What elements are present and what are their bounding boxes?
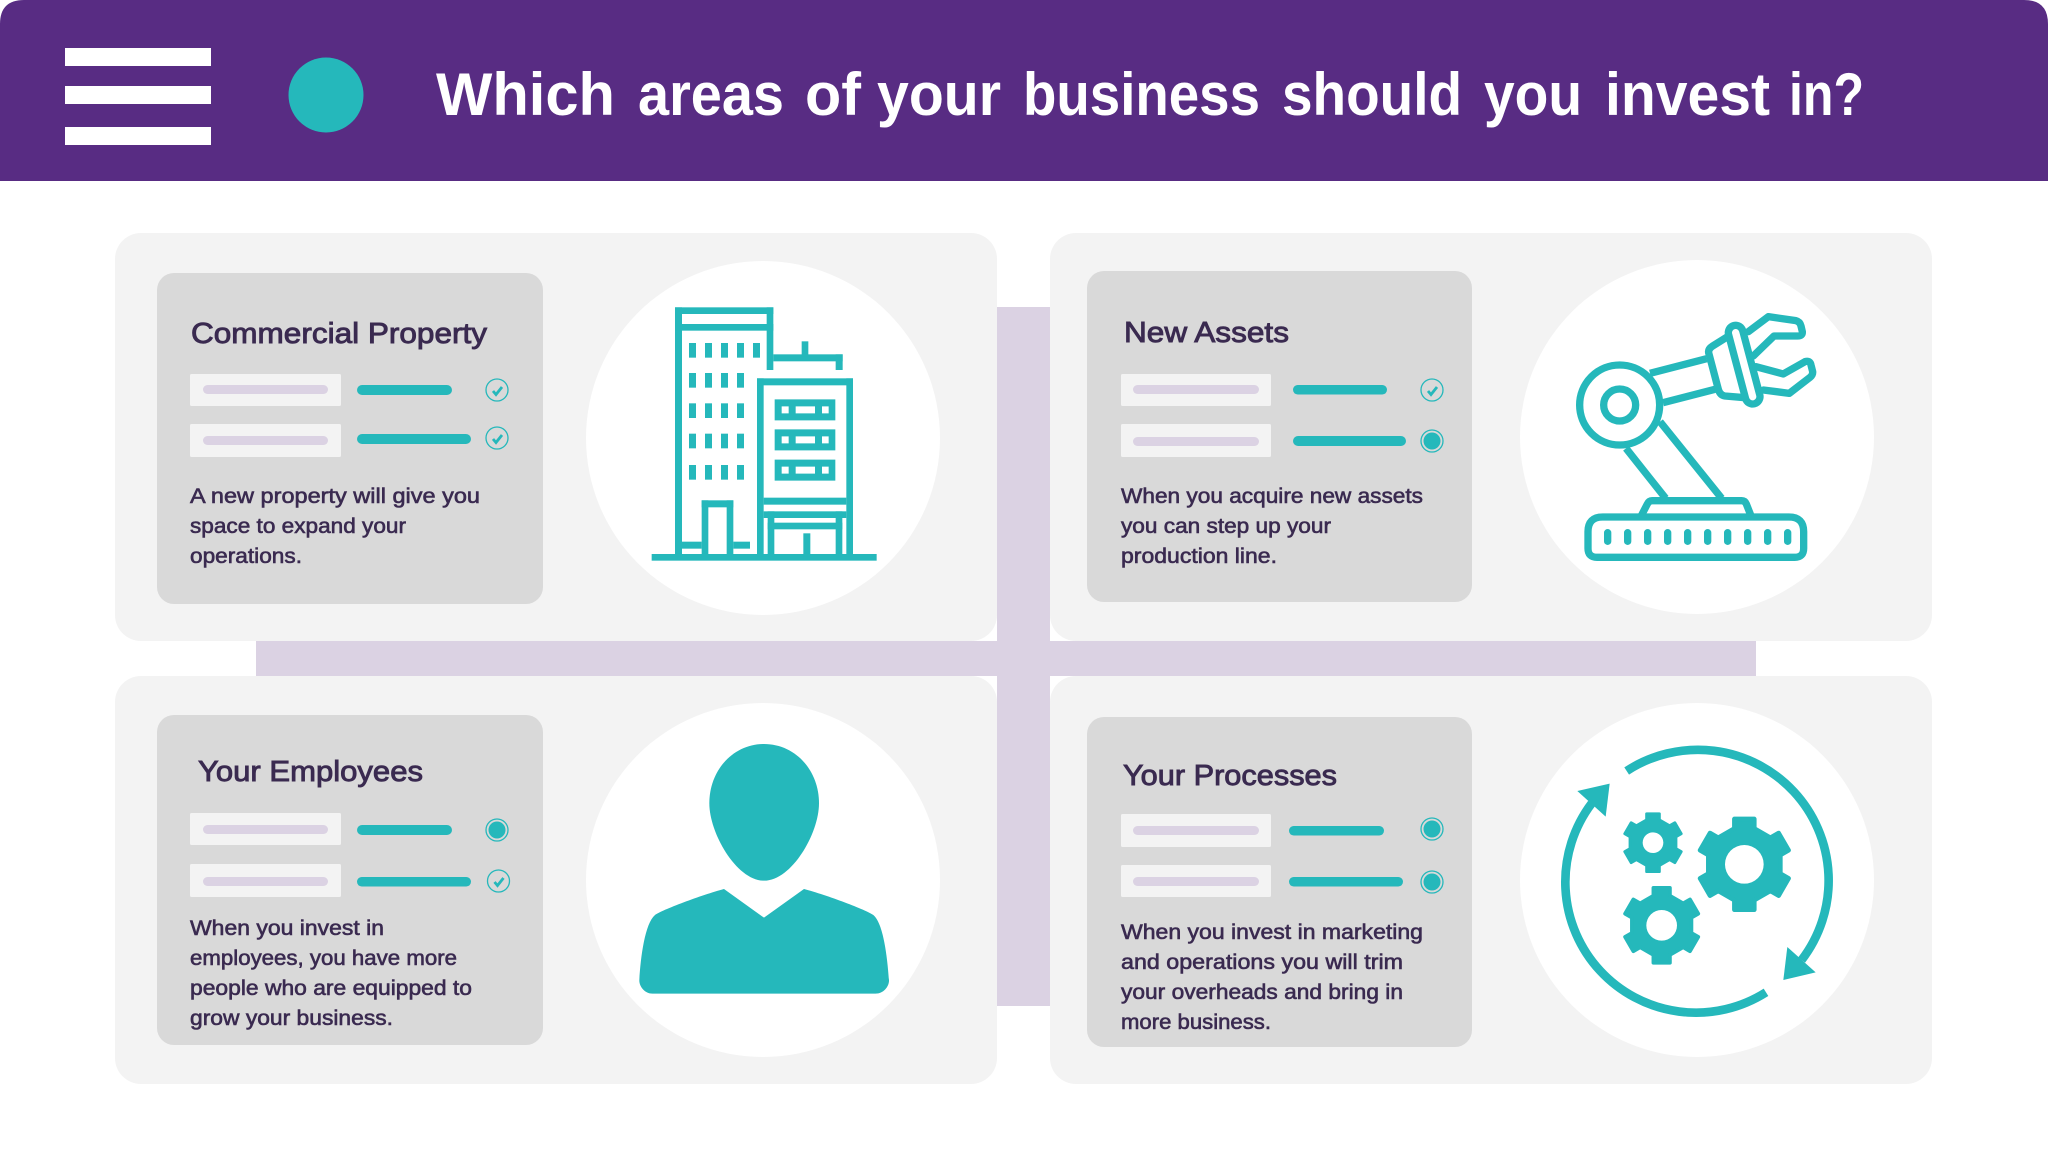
card: new assets [1087, 271, 1472, 602]
row 2 [1121, 424, 1443, 457]
icon: menu bars [65, 48, 211, 145]
icon circle: person [586, 703, 940, 1057]
body text: When you acquire new assets [1121, 485, 1423, 508]
body text: more business. [1121, 1011, 1271, 1034]
title: should [1282, 61, 1462, 128]
title [436, 61, 1864, 128]
panel: commercial property [115, 233, 997, 641]
title: your [877, 61, 1001, 128]
panel: new assets [1050, 233, 1932, 641]
heading: Commercial Property [191, 318, 488, 350]
row 1 [190, 813, 508, 845]
heading: New Assets [1124, 317, 1289, 349]
body text: operations. [190, 545, 302, 568]
panel: your processes [1050, 676, 1932, 1084]
title: areas [638, 61, 784, 128]
body text: employees, you have more [190, 947, 457, 970]
body text: space to expand your [190, 515, 406, 538]
title: you [1484, 61, 1582, 128]
body text: people who are equipped to [190, 977, 472, 1000]
card: commercial property [157, 273, 543, 604]
body text [190, 485, 480, 568]
body text: you can step up your [1121, 515, 1331, 538]
row 2 [190, 864, 510, 897]
body text: A new property will give you [190, 485, 480, 508]
body text [1121, 485, 1423, 568]
card: your employees [157, 715, 543, 1045]
heading: Your Processes [1123, 760, 1337, 792]
body text: production line. [1121, 545, 1277, 568]
row 1 [1121, 814, 1443, 847]
icon circle: gears and cycle arrows [1520, 703, 1874, 1057]
title: invest [1605, 61, 1770, 128]
icon circle: robot arm [1520, 260, 1874, 614]
body text: When you invest in [190, 917, 384, 940]
body text: When you invest in marketing [1121, 921, 1423, 944]
row 2 [190, 424, 508, 457]
panel: your employees [115, 676, 997, 1084]
title: in? [1789, 61, 1864, 128]
body text: your overheads and bring in [1121, 981, 1403, 1004]
row 2 [1121, 865, 1443, 897]
title: business [1023, 61, 1260, 128]
header band [0, 0, 2048, 181]
body text: grow your business. [190, 1007, 393, 1030]
title: Which [436, 61, 615, 128]
row 1 [1121, 374, 1443, 406]
heading: Your Employees [198, 756, 423, 788]
body text [1121, 921, 1423, 1034]
icon circle: building [586, 261, 940, 615]
body text [190, 917, 472, 1030]
row 1 [190, 374, 508, 406]
lilac cross behind panels [256, 307, 1756, 1006]
card: your processes [1087, 717, 1472, 1047]
body text: and operations you will trim [1121, 951, 1403, 974]
title: of [805, 61, 862, 128]
icon: teal dot [288, 58, 364, 132]
